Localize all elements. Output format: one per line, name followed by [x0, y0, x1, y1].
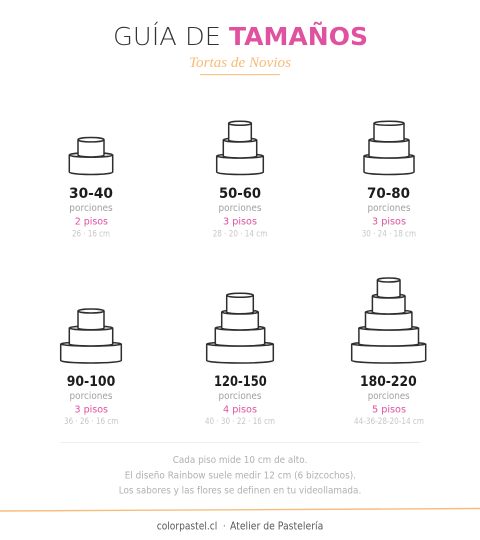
card: 50-60: porciones: [218, 203, 262, 214]
card: 180-220: 44-36-28-20-14 cm: [354, 417, 424, 427]
card: 70-80: 30 · 24 · 18 cm: [362, 230, 416, 240]
icon: 3 tier cake: [364, 121, 414, 174]
card: 50-60: 3 pisos: [223, 216, 257, 228]
card: 90-100: 90-100: [67, 374, 116, 390]
title: TAMAÑOS: [229, 22, 368, 51]
card: 180-220: [352, 278, 426, 427]
subtitle: Tortas de Novios: [189, 55, 291, 71]
card: 180-220: porciones: [368, 391, 410, 402]
footer text: ·: [223, 521, 226, 533]
card: 30-40: porciones: [69, 203, 113, 214]
card: 180-220: 5 pisos: [372, 405, 406, 416]
card: 90-100: 3 pisos: [74, 405, 108, 416]
card: 50-60: 28 · 20 · 14 cm: [213, 230, 267, 240]
card: 180-220: 180-220: [360, 374, 417, 390]
footer text: colorpastel.cl: [157, 521, 217, 533]
icon: 3 tier cake: [217, 121, 263, 174]
card: 70-80: 70-80: [367, 186, 410, 202]
icon: 2 tier cake: [69, 138, 113, 174]
card: 30-40: 2 pisos: [75, 216, 108, 228]
card: 50-60: 50-60: [219, 186, 261, 202]
card: 120-150: 40 · 30 · 22 · 16 cm: [205, 417, 275, 427]
card: 120-150: [205, 293, 275, 427]
card: 70-80: 3 pisos: [372, 216, 406, 228]
subtitle underline: [200, 74, 280, 75]
footer line: [0, 508, 480, 511]
notes: Los sabores y las flores se definen en tu videollamada.: [119, 486, 361, 497]
notes: El diseño Rainbow suele medir 12 cm (6 bizcochos).: [125, 470, 356, 481]
card: 120-150: 120-150: [214, 374, 267, 390]
card: 90-100: 36 · 26 · 16 cm: [64, 417, 118, 427]
card: 90-100: [61, 309, 121, 427]
title: [113, 22, 368, 51]
card: 30-40: 30-40: [69, 186, 113, 202]
icon: 5 tier cake: [352, 278, 426, 363]
notes: Cada piso mide 10 cm de alto.: [173, 455, 307, 466]
icon: 3 tier cake: [61, 309, 121, 363]
card: 120-150: porciones: [218, 391, 262, 402]
title: GUÍA DE: [113, 22, 221, 51]
card: 30-40: [69, 138, 113, 240]
card: 90-100: porciones: [70, 391, 113, 402]
icon: 4 tier cake: [207, 293, 273, 363]
card: 70-80: [362, 121, 416, 240]
card: 30-40: 26 · 16 cm: [72, 230, 110, 240]
notes: [119, 455, 361, 497]
card: 50-60: [213, 121, 267, 240]
card: 120-150: 4 pisos: [223, 405, 257, 416]
footer text: Atelier de Pastelería: [230, 521, 323, 533]
card: 70-80: porciones: [368, 203, 411, 214]
footer text: [157, 521, 323, 533]
